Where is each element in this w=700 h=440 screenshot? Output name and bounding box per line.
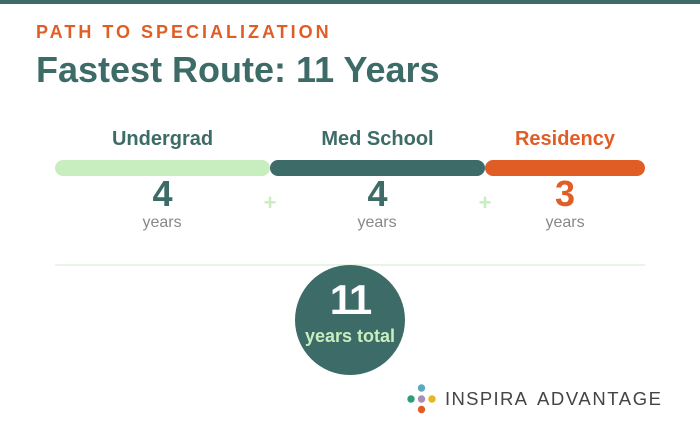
value: residency years: 3 (555, 173, 575, 214)
logo wordmark (445, 388, 661, 409)
logo icon dots (407, 384, 436, 413)
logo: Inspira Advantage (407, 384, 661, 414)
total circle (295, 265, 405, 375)
unit: residency: years (545, 214, 585, 231)
timeline bar: med school (270, 160, 485, 176)
total number: 11 (330, 276, 370, 323)
value: undergrad years: 4 (152, 173, 173, 214)
plus sign: + (264, 190, 276, 215)
label: med school: Med School (321, 128, 434, 150)
total caption: years total (305, 326, 395, 346)
unit: med school: years (357, 214, 397, 231)
value: med school years: 4 (367, 173, 388, 214)
unit: undergrad: years (142, 214, 182, 231)
title: Fastest Route: 11 Years (36, 49, 440, 90)
top accent bar (0, 0, 700, 4)
logo wordmark: ADVANTAGE (537, 388, 661, 409)
timeline bar: undergrad (55, 160, 270, 176)
timeline bar: residency (485, 160, 645, 176)
logo wordmark: INSPIRA (445, 388, 528, 409)
plus sign: + (479, 190, 491, 215)
eyebrow heading: PATH TO SPECIALIZATION (36, 22, 332, 42)
label: undergrad: Undergrad (112, 128, 213, 150)
divider (55, 264, 645, 266)
label: residency: Residency (515, 128, 615, 150)
